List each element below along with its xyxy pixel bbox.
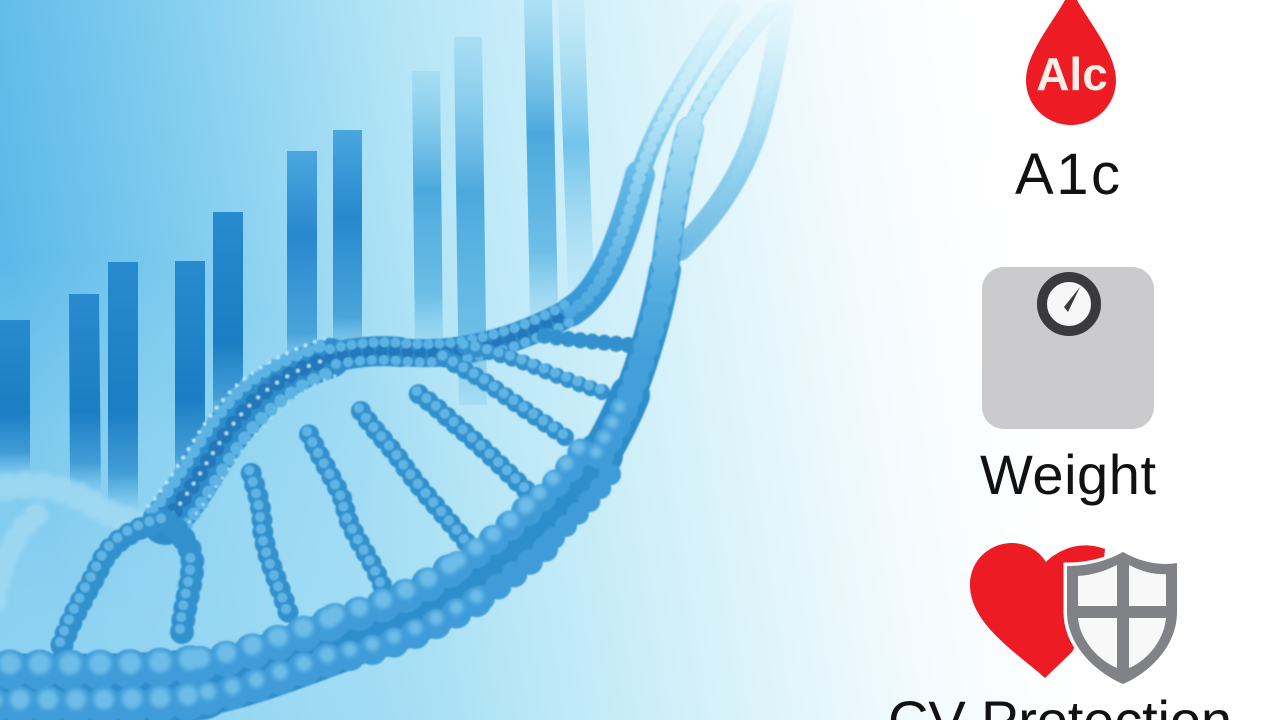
front strand beads [0, 10, 770, 706]
label: Weight: Weight [980, 443, 1156, 506]
back strand across the middle [165, 10, 730, 522]
icon: heart with shield [970, 543, 1177, 684]
icon: weighing scale [982, 267, 1154, 429]
rung highlights [60, 344, 600, 642]
DNA double helix [0, 10, 783, 706]
upper right strand fading out [680, 10, 783, 250]
front strand base [0, 10, 770, 690]
label: A1c: A1c [1015, 142, 1120, 207]
faint far strand on the left [0, 485, 165, 600]
back strand beads [148, 10, 730, 534]
icon: A1c blood drop [1026, 0, 1116, 125]
base pair rungs [62, 335, 628, 645]
icon: A1c blood drop: Alc [1036, 48, 1108, 100]
bar chart backdrop [0, 0, 594, 510]
front strand highlights [0, 392, 626, 700]
